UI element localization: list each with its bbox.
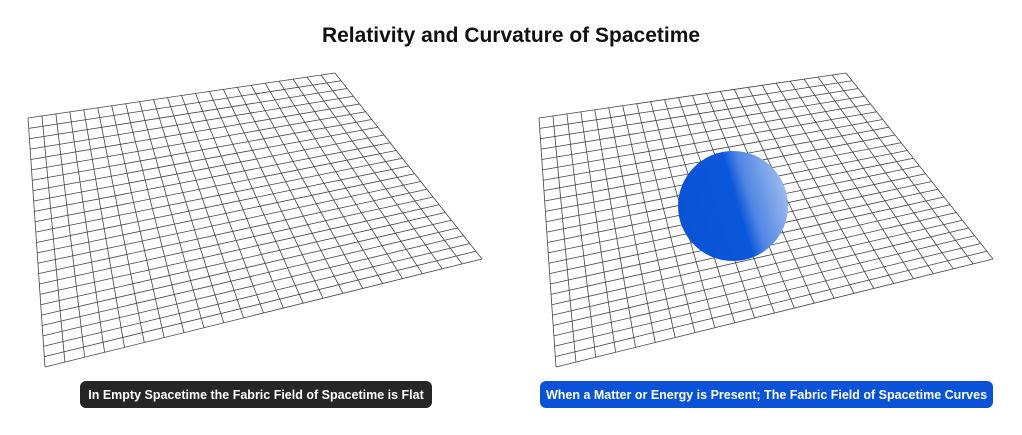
title: Relativity and Curvature of Spacetime <box>322 24 700 47</box>
label: flat: In Empty Spacetime the Fabric Field of Spacetime is Flat <box>88 388 424 402</box>
label: curved: When a Matter or Energy is Present; The Fabric Field of Spacetime Curves <box>546 388 987 402</box>
label: flat <box>80 381 432 408</box>
curved grid <box>539 73 993 367</box>
label: curved <box>540 381 993 408</box>
blue ball <box>678 151 788 261</box>
flat grid <box>28 73 482 367</box>
